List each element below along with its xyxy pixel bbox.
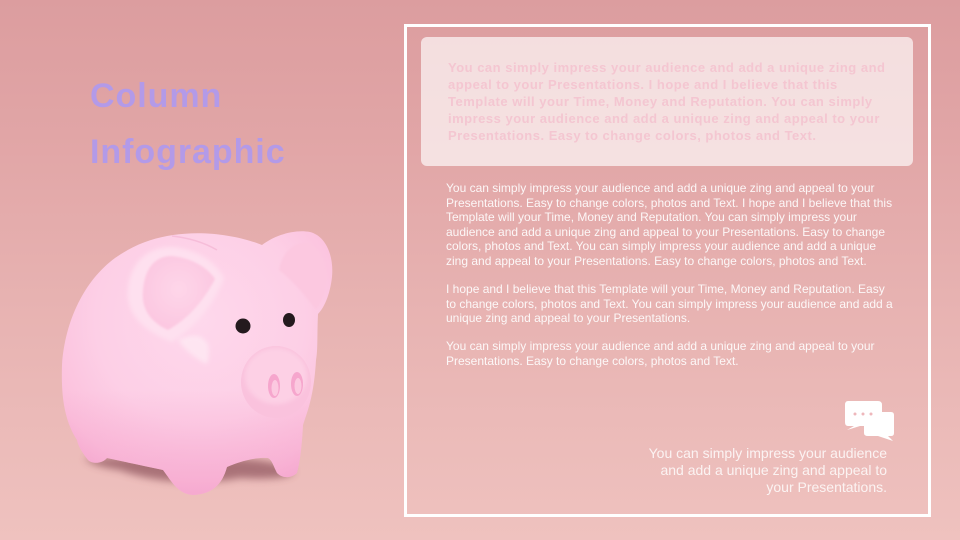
icon: chat bubbles [845, 401, 894, 441]
caption text: your Presentations. [766, 479, 887, 495]
highlighted panel [421, 37, 913, 166]
body paragraph 3: Presentations. Easy to change colors, photos and Text. [446, 354, 739, 368]
body paragraph 3 [446, 339, 875, 368]
body paragraph 1: audience and add a unique zing and appeal to your Presentations. Easy to change [446, 224, 885, 238]
coin slot [172, 236, 217, 250]
highlights [178, 336, 209, 364]
body paragraph 2: unique zing and appeal to your Presentations. [446, 311, 690, 325]
body paragraph 1: zing and appeal to your Presentations. Easy to change colors, photos and Text. [446, 254, 867, 268]
lower shading [84, 421, 302, 495]
body paragraph 1: Template will your Time, Money and Reputation. You can simply impress your [446, 210, 857, 224]
body paragraph 2 [446, 282, 893, 325]
body paragraph 2: I hope and I believe that this Template will your Time, Money and Reputation. Easy [446, 282, 885, 296]
left ear rim [128, 247, 224, 342]
caption text [649, 445, 887, 495]
ground shadow [84, 456, 293, 482]
title: Column [90, 77, 222, 115]
right ear [279, 243, 326, 310]
white frame [404, 24, 931, 517]
snout [241, 346, 311, 418]
body paragraph 1: colors, photos and Text. You can simply impress your audience and add a unique [446, 239, 876, 253]
pig body [62, 231, 332, 495]
body paragraph 2: to change colors, photos and Text. You can simply impress your audience and add a [446, 296, 893, 310]
highlighted panel text: impress your audience and add a unique zing and appeal to your [448, 111, 880, 126]
highlighted panel text: appeal to your Presentations. I hope and I believe that this [448, 77, 838, 92]
body paragraph 1: You can simply impress your audience and add a unique zing and appeal to your [446, 181, 875, 195]
highlighted panel text [448, 60, 885, 143]
body paragraph 1: Presentations. Easy to change colors, photos and Text. I hope and I believe that this [446, 196, 892, 210]
caption text: You can simply impress your audience [649, 445, 887, 461]
title [90, 77, 286, 171]
nostrils [268, 374, 280, 398]
left ear [143, 256, 215, 330]
caption text: and add a unique zing and appeal to [660, 462, 887, 478]
icon: piggy bank [62, 231, 332, 495]
highlighted panel text: Presentations. Easy to change colors, photos and Text. [448, 128, 816, 143]
body paragraph 3: You can simply impress your audience and add a unique zing and appeal to your [446, 339, 875, 353]
title: Infographic [90, 133, 286, 171]
highlighted panel text: Template will your Time, Money and Reputation. You can simply [448, 94, 873, 109]
highlighted panel text: You can simply impress your audience and add a unique zing and [448, 60, 885, 75]
eyes [236, 318, 250, 334]
body paragraph 1 [446, 181, 892, 268]
